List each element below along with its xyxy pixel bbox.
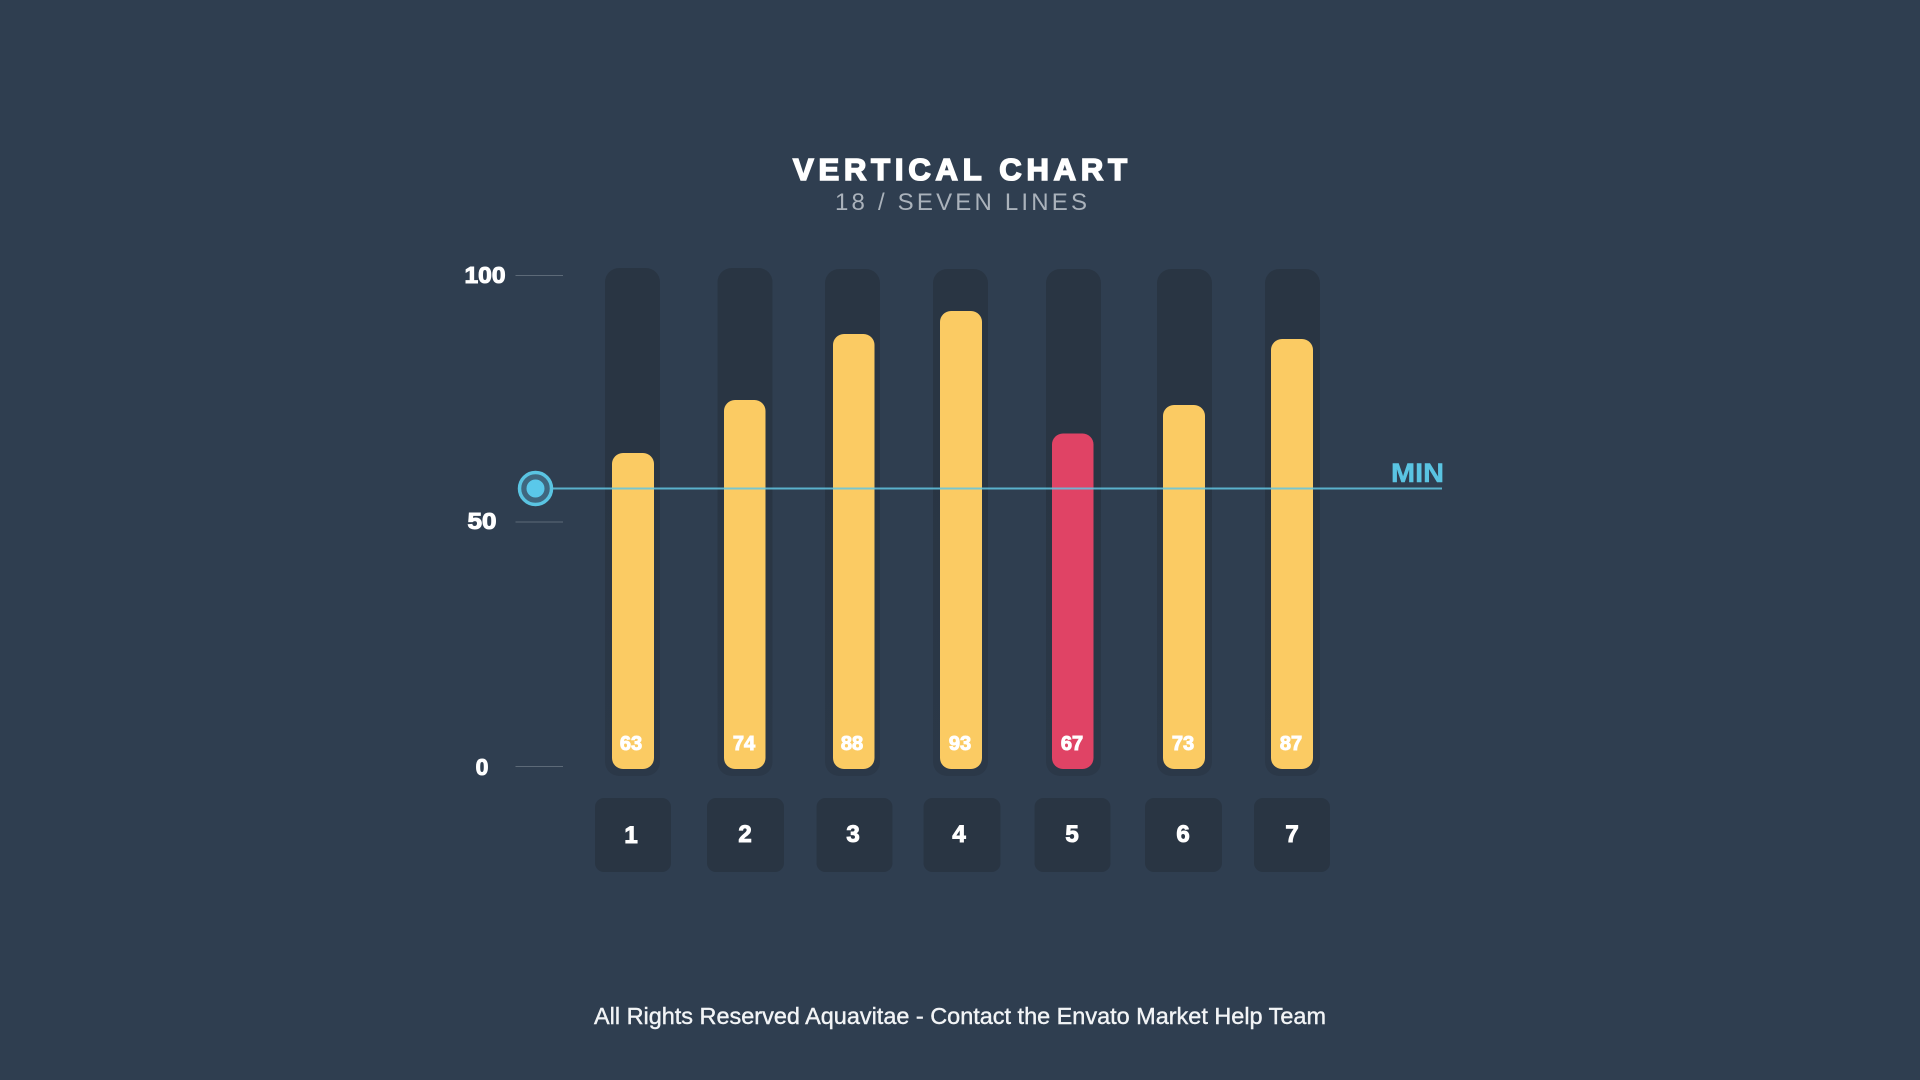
MIN label: MIN: [1391, 458, 1444, 488]
category box 3: 3: [846, 821, 860, 848]
column 1: 63: [620, 733, 642, 755]
column 5: [1034, 269, 1110, 872]
axis label: 100: 100: [464, 262, 506, 288]
bar: 93: [940, 311, 982, 769]
footer: All Rights Reserved Aquavitae - Contact the Envato Market Help Team: [594, 1003, 1326, 1029]
column 6: [1145, 269, 1222, 872]
axis label: 50: 50: [468, 508, 496, 534]
column 5: 67: [1061, 733, 1083, 755]
bar: 87: [1271, 339, 1313, 769]
column 1: [595, 268, 671, 872]
y axis: [464, 262, 563, 780]
category box 7: 7: [1285, 821, 1299, 848]
minimum threshold line: [548, 488, 1442, 490]
category box 2: 2: [738, 821, 752, 848]
column 3: 88: [841, 733, 863, 755]
category box 6: [1145, 798, 1222, 872]
bar: 67: [1052, 434, 1094, 769]
column 2: 74: [733, 733, 756, 755]
column 3: [816, 269, 892, 872]
title: VERTICAL CHART: [793, 152, 1127, 187]
bar: 63: [612, 453, 654, 769]
category box 4: 4: [952, 821, 966, 848]
column 7: [1254, 269, 1330, 872]
bar: 74: [724, 400, 766, 769]
category box 3: [816, 798, 892, 872]
column 4: [924, 269, 1000, 872]
bar: 88: [833, 334, 874, 769]
category box 5: 5: [1065, 821, 1079, 848]
bar: 73: [1163, 405, 1205, 769]
category box 6: 6: [1176, 821, 1190, 848]
column 7: 87: [1280, 733, 1302, 755]
category box 7: [1254, 798, 1330, 872]
column 6: 73: [1172, 733, 1194, 755]
category box 2: [707, 798, 784, 872]
axis label: 0: 0: [476, 754, 488, 780]
icon: target marker: [520, 472, 552, 504]
category box 1: [595, 798, 671, 872]
column 2: [707, 268, 784, 872]
category box 1: 1: [624, 822, 638, 849]
category box 5: [1034, 798, 1110, 872]
subtitle: 18 / SEVEN LINES: [835, 189, 1087, 216]
category box 4: [924, 798, 1000, 872]
column 4: 93: [949, 733, 971, 755]
